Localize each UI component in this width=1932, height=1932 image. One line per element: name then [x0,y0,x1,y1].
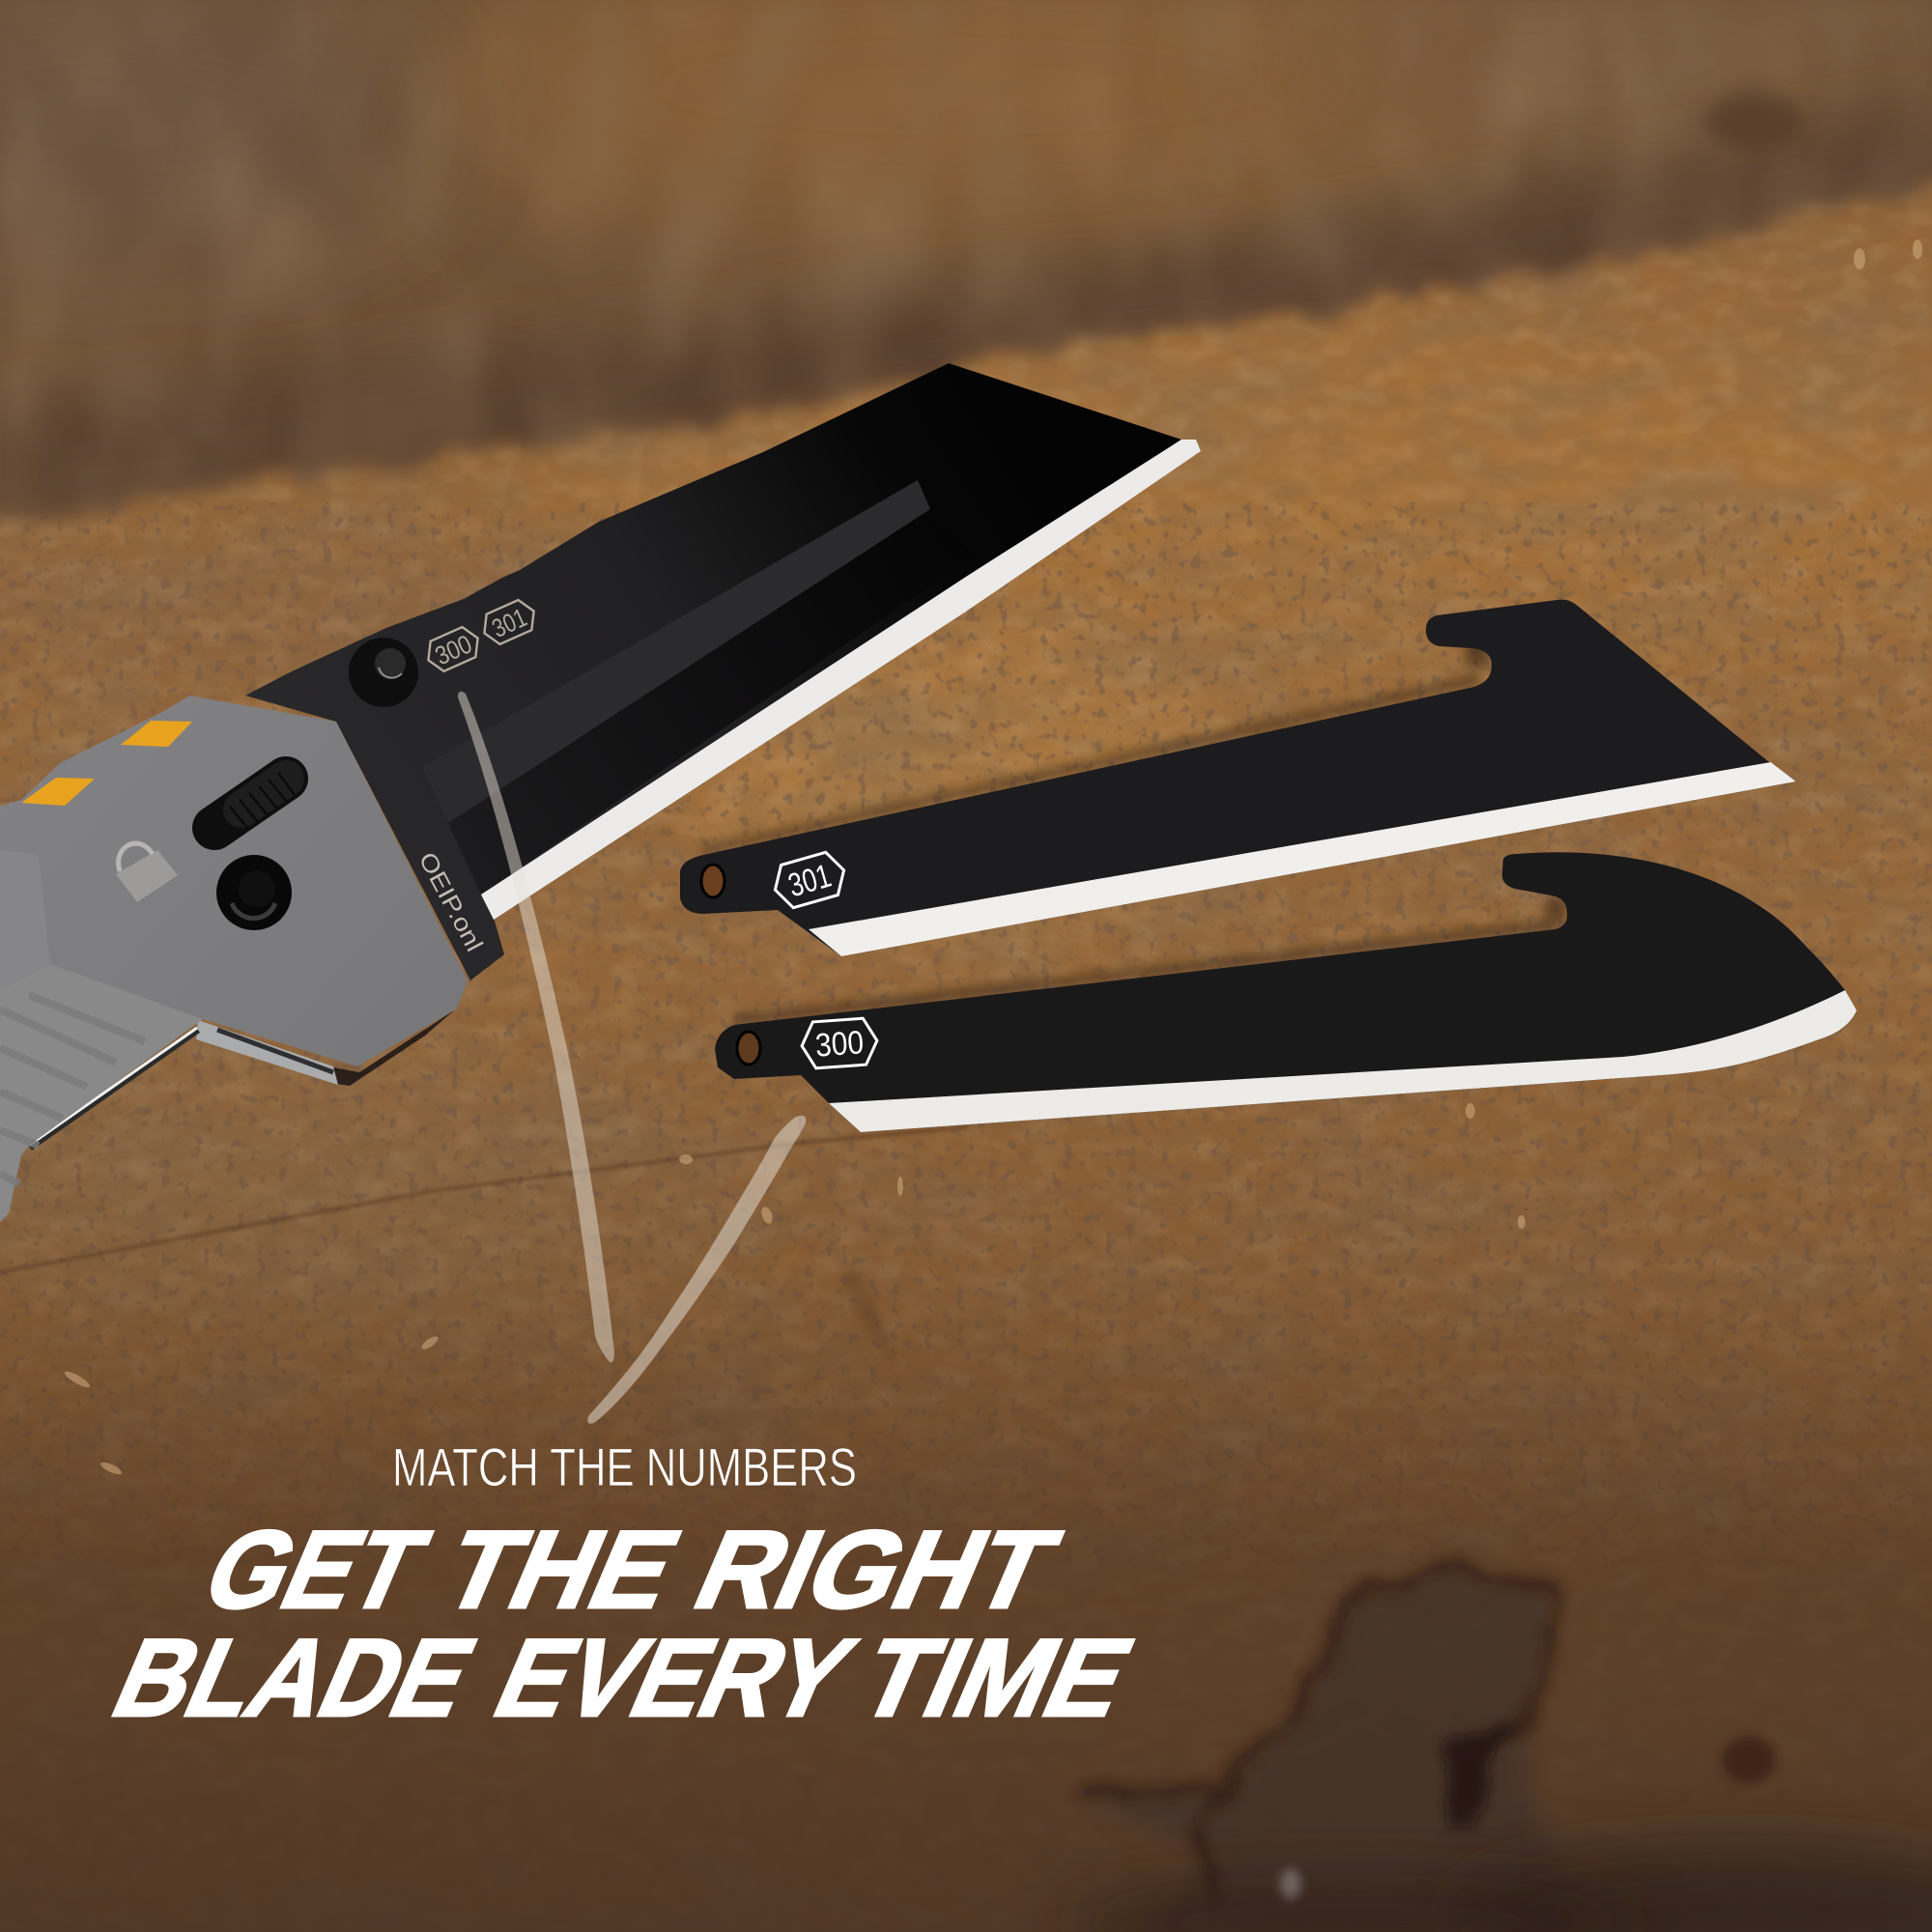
blade 300 hex label [800,1017,879,1069]
orange inlay strips [21,721,192,806]
headline line 1: THE [424,1509,697,1632]
background: blurred wood backdrop [0,0,1932,527]
knife handle [0,696,468,1222]
blade 301 white edge [809,762,1796,956]
thumb slider [214,773,295,829]
chips of wood on the plank [63,240,1922,1477]
soft shadows under the loose blades [703,638,1561,1020]
engraved hex label 300 [422,623,484,675]
dark bottom band [1449,1845,1932,1932]
blade 300 body [715,852,1857,1132]
main knife blade [245,363,1201,980]
arrow: line to the knife label [458,692,614,1362]
stain interior [1077,1558,1584,1932]
blade 301 hex label [769,849,850,911]
crack lines in the wood [0,1127,966,1352]
blade 300 hex label: 300 [814,1024,865,1065]
blade 301 body [680,600,1796,956]
blade 301 mounting hole [701,865,724,897]
arrow: line to the blade label [587,1116,806,1424]
blade 300 [715,852,1857,1132]
headline line 2: EVERY [477,1617,871,1740]
stain dark outline [1077,1558,1557,1903]
pivot screw [349,638,418,707]
lighter central bevel strip [422,480,930,823]
headline line 2 [96,1617,1151,1740]
engraved hex label 301: 301 [488,603,531,643]
engraved hex label 301 [478,596,540,648]
headline line 2: BLADE [96,1617,493,1740]
blade 300 white edge [829,990,1857,1132]
lower flat of the blade [448,509,976,895]
handle screw [216,855,292,930]
stain darkest core [1439,1724,1512,1831]
ribbed grip [0,964,203,1222]
headline line 1 [186,1509,1075,1632]
dark stain on the wood [1063,1558,1932,1932]
stain spot [1721,1737,1776,1783]
handle body [0,696,468,1222]
metal clip under the handle [30,1010,454,1148]
blade 301 [680,600,1796,956]
handle left facet [0,850,50,991]
blade body [245,363,1181,980]
out of focus speck [1280,1868,1301,1899]
headline [96,1509,1151,1740]
white cutting edge [481,440,1201,920]
headline line 2: TIME [840,1617,1151,1740]
blade 300 mounting hole [737,1032,760,1065]
blade 301 hex label: 301 [784,858,836,904]
headline line 1: GET [186,1509,444,1632]
subheading: MATCH THE NUMBERS [392,1436,857,1497]
headline line 1: RIGHT [677,1509,1075,1632]
engraved hex label 300: 300 [431,629,476,670]
lock icon [116,843,178,902]
engraved mark OEIP.onl: OEIP.onl [413,848,488,956]
